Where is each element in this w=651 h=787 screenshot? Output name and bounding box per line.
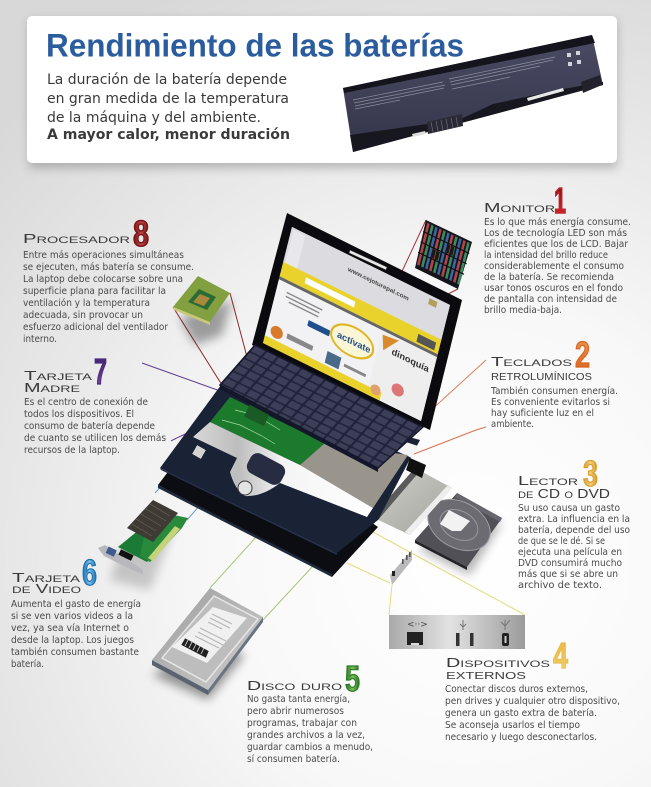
body: todos los dispositivos. El — [24, 409, 134, 420]
body: la intensidad del brillo reduce — [484, 250, 608, 261]
heading: Monitor — [484, 201, 556, 215]
body: Conectar discos duros externos, — [445, 684, 588, 695]
heading: title: Rendimiento de las baterías — [46, 28, 464, 64]
body: vez, ya sea vía Internet o — [11, 622, 129, 634]
body: Es lo que más energía consume. — [484, 216, 631, 228]
body: Se aconseja usarlos el tiempo — [445, 720, 580, 731]
body: de que se le dé. Si se — [518, 535, 605, 547]
laptop screen — [252, 213, 462, 430]
icon: video card — [98, 500, 188, 590]
subheading: de CD o DVD — [518, 487, 610, 501]
number 1: 1 — [554, 180, 566, 221]
body: necesario y luego desconectarlos. — [445, 732, 597, 743]
body: brillo media-baja. — [484, 305, 562, 316]
laptop base plate — [160, 385, 420, 553]
body — [24, 396, 166, 456]
section 4: dispositivos — [445, 635, 620, 743]
body: de la batería. Se recomienda — [484, 271, 614, 283]
number 5: 5 — [345, 658, 360, 699]
laptop screen: actívate — [336, 330, 372, 356]
body: batería, depende del uso — [518, 524, 630, 536]
icon: side port module — [390, 550, 412, 585]
section 7: tarjeta madre — [24, 351, 166, 456]
body: si se ven varios videos a la — [11, 611, 133, 622]
icon: laptop — [158, 213, 502, 577]
optical drive — [372, 468, 502, 575]
icon: ethernet port: <··> — [407, 620, 428, 630]
body: ventilación y la temperatura — [23, 297, 150, 309]
text block: intro: La duración de la batería depende — [47, 72, 287, 88]
heading: Lector — [518, 474, 579, 488]
laptop screen: dinoquía — [390, 347, 431, 375]
body: sí consumen batería. — [247, 753, 340, 765]
body: superficie plana para facilitar la — [23, 286, 166, 297]
icon: usb ports — [456, 620, 474, 646]
body — [484, 216, 631, 316]
body: pero abrir numerosos — [247, 706, 344, 717]
section 8: procesador — [23, 213, 194, 345]
panel: external ports — [389, 615, 525, 649]
icon: lcd pixel chip — [415, 220, 472, 289]
number 7: 7 — [94, 351, 107, 392]
heading: Dispositivos — [446, 656, 550, 670]
body: eficientes que los de LCD. Bajar — [484, 239, 628, 250]
body: Su uso causa un gasto — [518, 503, 620, 514]
keyboard — [220, 345, 423, 472]
body — [11, 598, 141, 670]
body: genera un gasto extra de batería. — [445, 707, 597, 719]
body: archivo de texto. — [518, 580, 602, 591]
body: También consumen energía. — [490, 385, 618, 397]
laptop lower case — [158, 410, 378, 577]
heading: Tarjeta — [24, 369, 92, 383]
icon: processor — [173, 276, 232, 345]
motherboard — [210, 397, 325, 465]
body: usar tonos oscuros en el fondo — [484, 283, 623, 294]
heading: Teclados — [491, 355, 572, 369]
body: Es conveniente evitarlos si — [491, 397, 610, 408]
body: Es el centro de conexión de — [24, 396, 148, 408]
laptop screen: www.cejoturepal.com — [346, 266, 410, 303]
body — [445, 684, 620, 743]
icon: battery — [343, 35, 603, 152]
body — [247, 693, 373, 765]
subheading: Madre — [24, 381, 80, 395]
number 3: 3 — [583, 453, 598, 494]
body: ambiente. — [491, 419, 534, 430]
body: esfuerzo adicional del ventilador — [23, 322, 168, 333]
heading: Tarjeta — [12, 571, 80, 585]
section 3: lector — [518, 453, 630, 591]
body: pen drives y cualquier otro dispositivo, — [445, 696, 620, 707]
body: interno. — [23, 334, 57, 345]
icon: hard disk — [152, 588, 263, 700]
body: extra. La influencia en la — [518, 514, 630, 525]
number 2: 2 — [575, 334, 590, 375]
body: hay suficiente luz en el — [491, 408, 594, 419]
body: grandes archivos a la vez, — [247, 730, 365, 741]
section 1: monitor — [484, 180, 631, 316]
body: Entre más operaciones simultáneas — [23, 249, 184, 261]
hinge — [406, 458, 426, 478]
body: desde la laptop. Los juegos — [11, 635, 134, 646]
body: recursos de la laptop. — [24, 445, 120, 456]
text block: intro: A mayor calor, menor duración — [47, 127, 290, 143]
body: DVD consumirá mucho — [518, 557, 622, 569]
body: La laptop debe colocarse sobre una — [23, 274, 183, 285]
body: se ejecuten, más batería se consume. — [23, 261, 194, 273]
body: adecuada, sin provocar un — [23, 310, 143, 321]
body — [490, 385, 618, 430]
palm rest and touchpad — [192, 422, 408, 517]
text block: intro: en gran medida de la temperatura — [47, 91, 289, 107]
body: programas, trabajar con — [247, 718, 357, 729]
icon: firewire port — [501, 620, 510, 646]
body: consumo de batería depende — [24, 420, 155, 432]
body: más que si se abre un — [518, 568, 618, 580]
subheading: de Video — [12, 582, 81, 596]
body: de pantalla con intensidad de — [484, 294, 617, 305]
body: No gasta tanta energía, — [247, 693, 350, 705]
subheading: RETROLUMÍNICOS — [491, 370, 592, 383]
text block: intro — [47, 72, 290, 143]
panel: header card — [27, 16, 617, 168]
number 4: 4 — [553, 635, 568, 676]
body: batería. — [11, 658, 44, 670]
body — [518, 503, 630, 591]
section 6: tarjeta de video — [11, 552, 141, 670]
section 2: teclados — [490, 334, 618, 430]
body — [23, 249, 194, 345]
body: ejecuta una película en — [518, 546, 622, 558]
body: también consumen bastante — [11, 646, 139, 658]
body: guardar cambios a menudo, — [247, 742, 373, 753]
body: considerablemente el consumo — [484, 261, 624, 272]
body: de cuanto se utilicen los demás — [24, 432, 166, 444]
subheading: EXTERNOS — [446, 671, 526, 682]
section 5: disco duro — [247, 658, 373, 765]
heading: Procesador — [23, 232, 131, 246]
callout lines — [142, 220, 525, 620]
text block: intro: de la máquina y del ambiente. — [47, 110, 261, 126]
number 6: 6 — [82, 552, 97, 593]
body: Los de tecnología LED son más — [484, 227, 627, 239]
heading: Disco duro — [247, 679, 342, 693]
number 8: 8 — [133, 213, 149, 254]
body: Aumenta el gasto de energía — [11, 598, 141, 610]
